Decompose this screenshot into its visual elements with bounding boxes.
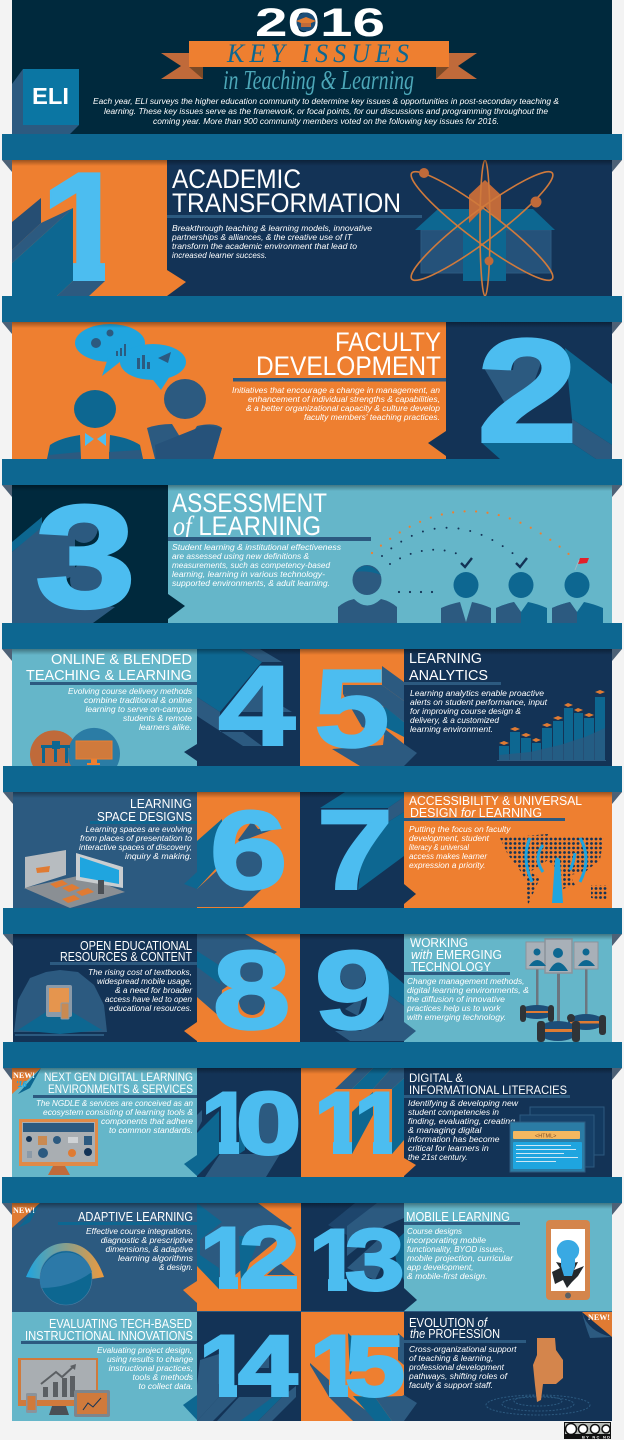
badge: new corner — [582, 1312, 612, 1338]
text block: pathways, shifting roles of — [408, 1371, 509, 1381]
icon: three graduates with checks and flag — [441, 558, 603, 623]
number 11 — [319, 1092, 392, 1154]
number 11: 1 — [354, 1076, 404, 1172]
text block: of teaching & learning, — [409, 1353, 493, 1363]
text block: Student learning & institutional effectiveness — [172, 542, 342, 552]
text block: with emerging technology. — [407, 1012, 506, 1022]
heading — [409, 1316, 500, 1341]
heading — [60, 939, 192, 964]
heading — [172, 164, 401, 218]
text block: Effective course integrations, — [86, 1226, 193, 1236]
number 6: 6 — [209, 788, 288, 913]
intro text: learning. These key issues serve as the framework, or focal points, for our discussions and programming throughout the — [104, 106, 548, 116]
text block: learners alike. — [139, 722, 192, 732]
heading: NEXT GEN DIGITAL LEARNING — [44, 1072, 193, 1084]
heading: ENVIRONMENTS & SERVICES — [48, 1084, 193, 1096]
intro text: coming year. More than 900 community members voted on the following key issues for 2016. — [153, 116, 499, 126]
text block: student competencies in — [408, 1107, 499, 1117]
text block: & managing digital — [408, 1125, 483, 1135]
text block: measurements, such as competency-based — [172, 560, 330, 570]
text block: learning environment. — [410, 724, 493, 734]
icon: monitor, tablet and phone with charts — [18, 1358, 110, 1417]
text block: development, student — [409, 833, 490, 843]
text block: access makes learner — [409, 851, 488, 861]
badge: new — [12, 1203, 40, 1228]
number 8: 8 — [212, 928, 291, 1053]
number 10: 0 — [236, 1074, 301, 1172]
text block: finding, evaluating, creating — [408, 1116, 515, 1126]
icon: html windows — [510, 1107, 604, 1172]
heading — [256, 327, 441, 381]
panel: 13 mobile learning — [301, 1203, 612, 1311]
text block: tools & methods — [132, 1372, 194, 1382]
text block: The rising cost of textbooks, — [88, 967, 192, 977]
text block: practices help us to work — [406, 1003, 501, 1013]
icon: two people — [47, 379, 222, 459]
heading: of LEARNING — [173, 511, 321, 541]
text block: diagnostic & prescriptive — [101, 1235, 193, 1245]
badge: creative commons — [564, 1422, 611, 1440]
logo: ELI: ELI — [32, 83, 69, 109]
text block: information has become — [408, 1134, 500, 1144]
text block: alerts on student performance, input — [410, 697, 548, 707]
number 11: 1 — [314, 1076, 364, 1172]
number 13: 1 — [310, 1212, 360, 1308]
text block — [172, 542, 342, 588]
text block — [408, 1344, 517, 1390]
title: 2016 — [255, 1, 385, 45]
number 10: 1 — [202, 1076, 252, 1172]
panel: 8 open educational resources — [13, 928, 300, 1053]
text block: transform the academic environment that lead to — [172, 241, 357, 251]
ribbon banner: KEY ISSUES — [226, 39, 409, 68]
panel: 7 accessibility — [300, 787, 612, 914]
heading: the PROFESSION — [410, 1327, 500, 1341]
icon: speech bubbles — [75, 324, 186, 390]
heading: ADAPTIVE LEARNING — [78, 1210, 193, 1224]
number 5: 5 — [314, 647, 390, 771]
icon: book and tablet burst — [14, 970, 107, 1036]
text block: students & remote — [123, 713, 192, 723]
intro text: Each year, ELI surveys the higher education community to determine key issues & opportunities in post-secondary teaching & — [93, 96, 559, 106]
heading: LEARNING — [409, 650, 482, 667]
heading — [409, 1073, 567, 1097]
heading — [409, 650, 488, 684]
panel: 10 next gen digital learning — [12, 1068, 301, 1177]
bar chart — [497, 690, 606, 760]
heading: FACULTY — [335, 327, 441, 357]
text block: learning, learning in various technology- — [172, 569, 325, 579]
number 1: 1 — [40, 140, 129, 313]
text block: faculty & support staff. — [409, 1380, 493, 1390]
text block — [171, 223, 372, 260]
text block: app development, — [407, 1262, 474, 1272]
text block: using results to change — [107, 1354, 193, 1364]
text block: incorporating mobile — [407, 1235, 486, 1245]
heading: WORKING — [410, 935, 468, 950]
heading: SPACE DESIGNS — [97, 809, 192, 824]
text block: widespread mobile usage, — [97, 976, 192, 986]
heading: OPEN EDUCATIONAL — [80, 939, 192, 953]
panel: 3 assessment of learning — [12, 475, 612, 638]
text block: critical for learners in — [408, 1143, 489, 1153]
heading — [97, 796, 192, 824]
text block: mobile projection, curricular — [407, 1253, 514, 1263]
icon: monitor with app tiles — [19, 1119, 98, 1175]
text block: access have led to open — [105, 994, 192, 1004]
panel: 9 working with emerging technology — [300, 928, 612, 1053]
text block: are assessed using new definitions & — [172, 551, 309, 561]
number 4: 4 — [218, 643, 296, 770]
heading: INFORMATIONAL LITERACIES — [409, 1085, 567, 1097]
number 3: 3 — [35, 475, 136, 638]
text block — [86, 1226, 194, 1272]
panel: 6 learning space designs — [13, 788, 300, 913]
number 15: 5 — [345, 1320, 405, 1414]
heading: TRANSFORMATION — [172, 188, 401, 218]
text block — [68, 686, 193, 732]
text block: professional development — [408, 1362, 505, 1372]
panel: 4 online and blended — [12, 643, 300, 770]
heading — [410, 935, 502, 974]
number 12 — [205, 1225, 297, 1289]
text block: & a need for broader — [115, 985, 193, 995]
number 12: 2 — [239, 1208, 300, 1306]
text block: supported environments, & adult learning. — [172, 578, 330, 588]
heading: RESOURCES & CONTENT — [60, 950, 192, 964]
text block: components that adhere — [101, 1116, 193, 1126]
title: 2016: 2016 — [255, 1, 385, 45]
text block — [97, 1345, 194, 1391]
icon: gauge — [26, 1243, 104, 1305]
text block: enhancement of individual strengths & capabilities, — [248, 394, 440, 404]
panel: 2 faculty development — [12, 310, 612, 474]
text block: interactive spaces of discovery, — [79, 842, 192, 852]
icon: pointing hand with ripples — [486, 1338, 590, 1415]
heading: ANALYTICS — [409, 667, 488, 684]
text block: Breakthrough teaching & learning models, innovative — [172, 223, 372, 233]
heading: TECHNOLOGY — [411, 959, 491, 974]
heading: INSTRUCTIONAL INNOVATIONS — [25, 1329, 193, 1343]
icon: html windows: <HTML> — [535, 1134, 556, 1140]
panel: 1 academic transformation — [12, 160, 612, 296]
text block: expression a priority. — [409, 860, 486, 870]
panel: 11 digital and informational literacies — [301, 1068, 612, 1177]
ribbon banner — [161, 39, 477, 79]
text block — [232, 385, 440, 422]
number 14: 1 — [200, 1318, 250, 1414]
text block: Change management methods, — [407, 976, 524, 986]
number 13 — [314, 1228, 402, 1292]
number 13: 3 — [345, 1212, 404, 1308]
badge: new corner: NEW! — [588, 1313, 610, 1322]
text block: learning to serve on-campus — [86, 704, 193, 714]
panel: 12 adaptive learning — [12, 1203, 301, 1311]
text block: instructional practices, — [109, 1363, 193, 1373]
text block: the diffusion of innovative — [407, 994, 505, 1004]
text block — [79, 824, 192, 861]
number 12: 1 — [200, 1210, 250, 1306]
number 15 — [315, 1334, 404, 1398]
heading: DESIGN for LEARNING — [410, 805, 542, 820]
icon: telepresence robots — [520, 939, 606, 1042]
heading — [26, 651, 192, 684]
text block — [409, 824, 511, 870]
badge: new: NEW! — [13, 1206, 35, 1215]
heading: TEACHING & LEARNING — [26, 667, 192, 684]
heading: LEARNING — [130, 796, 192, 811]
text block: faculty members' teaching practices. — [304, 412, 440, 422]
number 9: 9 — [314, 928, 393, 1053]
text block: & mobile-first design. — [407, 1271, 488, 1281]
dotted arcs — [372, 511, 571, 592]
text block: Cross-organizational support — [409, 1344, 517, 1354]
text block: to collect data. — [138, 1381, 193, 1391]
badge: new: NEW! — [13, 1071, 35, 1080]
heading: MOBILE LEARNING — [406, 1210, 510, 1224]
panel: 15 evolution of the profession — [301, 1312, 612, 1421]
icon: classroom desk and monitor — [30, 728, 120, 766]
text block: functionality, BYOD issues, — [407, 1244, 505, 1254]
text block — [88, 967, 193, 1013]
logo: ELI — [12, 69, 79, 134]
number 2: 2 — [477, 310, 578, 474]
badge: new: '16 — [16, 1080, 27, 1089]
intro text — [93, 96, 559, 126]
heading — [25, 1317, 193, 1343]
icon: atom and school house — [403, 160, 561, 296]
text block: dimensions, & adaptive — [106, 1244, 193, 1254]
text block — [408, 1098, 519, 1162]
badge: creative commons: BY NC ND — [582, 1434, 610, 1440]
heading: ACCESSIBILITY & UNIVERSAL — [409, 793, 582, 808]
number 14: 4 — [238, 1318, 297, 1414]
icon: world map and wireless tower — [500, 834, 608, 905]
heading: ASSESSMENT — [172, 488, 327, 518]
heading: EVALUATING TECH-BASED — [49, 1317, 192, 1331]
text block — [407, 1226, 514, 1281]
heading: ONLINE & BLENDED — [51, 651, 192, 668]
heading: DEVELOPMENT — [256, 351, 441, 381]
text block: for improving course design & — [410, 706, 521, 716]
icon: classroom — [24, 850, 125, 908]
badge: new — [12, 1068, 41, 1094]
text block — [406, 976, 529, 1022]
text block: educational resources. — [109, 1003, 192, 1013]
icon: phone with light bulb — [546, 1220, 590, 1300]
text block — [410, 688, 548, 734]
text block — [36, 1098, 193, 1135]
text block: the 21st century. — [408, 1152, 468, 1162]
text block: Evaluating project design, — [97, 1345, 192, 1355]
text block: The NGDLE & services are conceived as an — [36, 1098, 193, 1108]
text block: Learning analytics enable proactive — [410, 688, 544, 698]
panel: header — [12, 0, 612, 134]
text block: literacy & universal — [409, 842, 470, 852]
text block: to common standards. — [109, 1125, 193, 1135]
panel: 14 evaluating tech-based innovations — [12, 1312, 301, 1421]
text block: from places of presentation to — [80, 833, 192, 843]
text block: inquiry & making. — [125, 851, 192, 861]
heading: DIGITAL & — [409, 1073, 463, 1085]
text block: learning algorithms — [118, 1253, 194, 1263]
panel: 5 learning analytics — [300, 647, 612, 771]
text block: Evolving course delivery methods — [68, 686, 193, 696]
heading — [44, 1072, 193, 1096]
text block: delivery, & a customized — [410, 715, 499, 725]
text block: Identifying & developing new — [408, 1098, 519, 1108]
subtitle: in Teaching & Learning — [223, 65, 414, 95]
text block: & design. — [159, 1262, 193, 1272]
text block: digital learning environments, & — [407, 985, 529, 995]
text block: Learning spaces are evolving — [86, 824, 192, 834]
number 7: 7 — [316, 787, 393, 914]
text block: partnerships & alliances, & the creative use of IT — [171, 232, 353, 242]
text block: ecosystem consisting of learning tools & — [43, 1107, 193, 1117]
number 10 — [206, 1090, 298, 1156]
icon: person one — [338, 565, 397, 623]
text block: combine traditional & online — [84, 695, 192, 705]
text block: increased learner success. — [172, 250, 267, 260]
heading: EVOLUTION of — [409, 1316, 488, 1330]
number 14 — [204, 1334, 298, 1397]
heading: with EMERGING — [411, 947, 502, 962]
heading — [172, 488, 327, 541]
heading: ACADEMIC — [172, 164, 301, 194]
number 15: 1 — [310, 1318, 360, 1414]
text block: Course designs — [407, 1226, 463, 1236]
heading — [409, 793, 582, 820]
text block: & a better organizational capacity & culture develop — [246, 403, 440, 413]
text block: Putting the focus on faculty — [409, 824, 511, 834]
text block: Initiatives that encourage a change in management, an — [232, 385, 440, 395]
